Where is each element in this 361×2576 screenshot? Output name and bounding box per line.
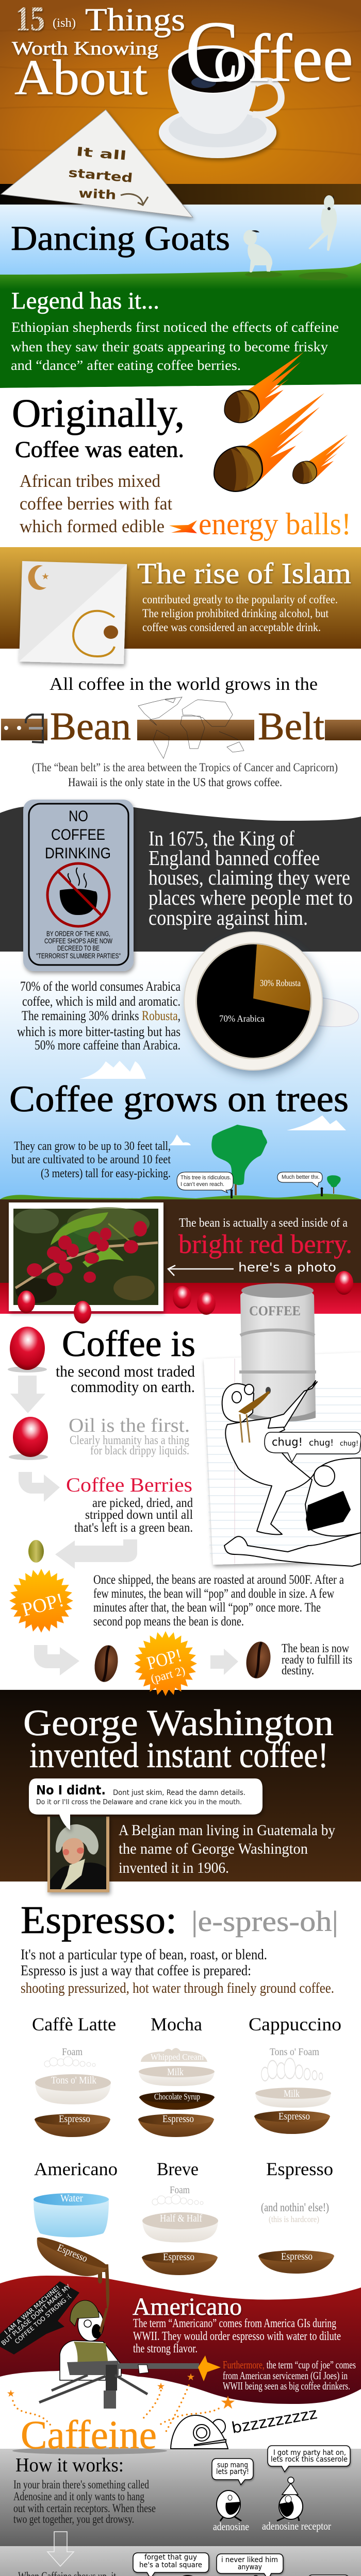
text block: shepherds: when they saw their goats appearing to become frisky [11, 339, 329, 354]
icon: flaming coffee ball 1 [224, 352, 304, 423]
robusta label: 30% Robusta [260, 978, 301, 988]
panel: coffee grows on trees sky [0, 952, 361, 1199]
character: adenosine [217, 2490, 241, 2521]
speech bubble: party hat: lets rock this casserole [271, 2455, 348, 2464]
heading: originally: Originally, [12, 391, 185, 435]
diagram: mocha: Whipped Cream [151, 2052, 204, 2062]
arrow: left [55, 1539, 137, 1569]
diagram: mocha: Espresso [162, 2113, 194, 2125]
diagram: americano: Water [60, 2193, 83, 2204]
label: adenosine receptor: adenosine receptor [262, 2520, 331, 2532]
panel: how it works 2 [0, 2546, 361, 2576]
text block: adenosine: Adenosine and it only wants to hang [13, 2490, 144, 2503]
icon: green bean [28, 1540, 44, 1563]
text block: arabica and robusta: The remaining 30% drinks Robusta, [22, 1008, 180, 1023]
world map outline [138, 697, 244, 758]
speech bubble: war machine: BUT PLEASE DON'T MAKE MY [0, 2283, 72, 2347]
speech bubble: party hat [268, 2446, 350, 2472]
speech bubble: chug: chug! [309, 1438, 334, 1448]
diagram: cappuccino: Espresso [278, 2111, 310, 2122]
napkin: it all started with: started [68, 165, 133, 185]
speech bubble: much better: Much better thx. [282, 1174, 320, 1180]
speech bubble: war machine: I AM A WAR MACHINE! [3, 2284, 61, 2336]
heading: coffee grows on trees: Coffee grows on trees [9, 1078, 349, 1120]
diagram: cappuccino: Tons o' Foam [270, 2046, 319, 2058]
sign: no coffee drinking: DECREED TO BE [57, 944, 100, 952]
tilted espresso: Espresso [56, 2242, 89, 2264]
text block: arabica and robusta: 70% of the world consumes Arabica [20, 979, 180, 994]
mug handle [253, 81, 281, 115]
text block: adenosine: In your brain there's something called [13, 2478, 149, 2491]
icon: napkin with coffee stain crescent [19, 561, 127, 664]
belt strap right [325, 720, 361, 740]
starburst: pop part 2: POP! [145, 1645, 184, 1673]
icon: flaming coffee ball 2 [214, 393, 324, 492]
text block: african tribes [20, 471, 172, 536]
diagram: espresso: (and nothin' else!) [261, 2201, 329, 2214]
diagram: breve: Breve [157, 2159, 199, 2179]
title: About [14, 50, 147, 106]
napkin: it all started with [1, 110, 193, 217]
speech bubble: chug: chug! [340, 1440, 358, 1448]
panel: how it works 1 [0, 2449, 361, 2546]
diagram: mocha: Milk [167, 2066, 184, 2078]
starburst: pop [9, 1569, 73, 1633]
word: belt: Belt [258, 705, 324, 748]
berries on branch [27, 1221, 147, 1286]
text block: islam [142, 593, 338, 634]
portrait: george washington [47, 1817, 109, 1892]
text block: king: In 1675, the King of [149, 826, 294, 850]
text block: second most traded: commodity on earth. [71, 1378, 195, 1396]
panel: originally white background [0, 384, 361, 547]
diagram: breve: Espresso [163, 2251, 194, 2263]
text block: belgian man [119, 1822, 335, 1876]
sign: no coffee drinking: NO [69, 808, 88, 825]
people [230, 1187, 323, 1198]
coffee stream into mouth [99, 2308, 108, 2334]
belt strap left [1, 719, 47, 740]
diagram: breve: Half & Half [160, 2213, 202, 2224]
torso [60, 2341, 121, 2380]
text block: espresso definition [21, 1946, 334, 1996]
heading: espresso: Espresso: [21, 1899, 177, 1942]
bean belt graphic [1, 697, 361, 758]
lower leg [224, 1533, 361, 1566]
text block: king [149, 826, 353, 929]
text block: picked and dried: are picked, dried, and [92, 1496, 193, 1510]
speech bubble: forget that guy [133, 2553, 209, 2576]
starburst: pop part 2: (part 2) [150, 1664, 187, 1685]
speech bubble: no i didnt: No I didnt. [36, 1783, 106, 1798]
icon: saucer [159, 107, 276, 158]
text block: cup of joe [223, 2359, 356, 2392]
energy balls: energy balls! [199, 507, 351, 541]
tall tree [235, 1180, 237, 1195]
panel: rise of islam [0, 547, 361, 664]
text block: picked and dried: stripped down until all [85, 1508, 193, 1522]
tilted espresso [29, 2233, 109, 2285]
speech bubble: lonely [308, 2575, 349, 2576]
text block: adenosine: two get together, you get drowsy. [13, 2513, 134, 2526]
caption: hawaii: Hawaii is the only state in the US that grows coffee. [68, 776, 282, 789]
text block: arabica and robusta: coffee, which is mild and aromatic. [22, 994, 180, 1009]
icon: second coffee berry [9, 1417, 48, 1460]
speech bubble: no i didnt: Do it or I'll cross the Delaware and crane kick you in the mouth. [36, 1799, 242, 1806]
speech bubble: no i didnt: Dont just skim, Read the damn details. [113, 1789, 245, 1797]
character: sleeping head [171, 2415, 228, 2449]
speech bubble: war machine: COFFEE TOO STRONG :( [13, 2293, 73, 2345]
text block: arabica and robusta: 50% more caffeine than Arabica. [35, 1038, 180, 1053]
diagram: breve [142, 2159, 218, 2275]
diagram: espresso: Espresso [281, 2251, 313, 2262]
panel: king of england banned coffee [0, 807, 361, 952]
word: bean: Bean [50, 705, 131, 748]
text block: tree height: but are cultivated to be around 10 feet [11, 1153, 171, 1166]
text block: americano origin [133, 2317, 341, 2355]
arrow on napkin [121, 194, 148, 205]
heading: americano: Americano [133, 2293, 242, 2320]
panel: wooden table header [0, 0, 361, 184]
speech bubble: party hat: I got my party hat on, [273, 2449, 346, 2457]
text block: bean's destiny [282, 1642, 352, 1677]
diagram: cappuccino: Milk [284, 2088, 300, 2099]
characters: caffeine blocks receptors [133, 2553, 349, 2576]
text block: belgian man: A Belgian man living in Guatemala by [119, 1822, 335, 1839]
body [225, 1417, 361, 1536]
diagram: caffe latte: Tons o' Milk [51, 2075, 96, 2086]
notebook paper [204, 1352, 361, 1565]
text block: americano origin: the strong flavor. [133, 2342, 198, 2355]
diagram: espresso [258, 2159, 334, 2274]
text block: african tribes: which formed edible [20, 516, 165, 536]
character: adenosine receptor [277, 2477, 303, 2521]
arrow: bend right 2 [34, 1645, 79, 1675]
text: seed inside berry: The bean is actually a seed inside of a [179, 1216, 348, 1230]
icon: energy streak [169, 520, 197, 533]
text block: tree height [11, 1140, 171, 1180]
arrow: right [210, 1649, 238, 1675]
text block: black drippy liquids [70, 1434, 189, 1458]
speech bubble: chug: chug! [272, 1436, 303, 1448]
diagram: espresso: Espresso [266, 2159, 333, 2179]
text block: picked and dried [74, 1496, 193, 1535]
diagram: cappuccino: Cappuccino [249, 2014, 341, 2035]
heading: invented instant coffee: invented instant coffee! [29, 1736, 329, 1775]
buckle prong [29, 727, 43, 730]
text block: second most traded: the second most traded [56, 1362, 195, 1380]
label: adenosine: adenosine [213, 2520, 249, 2533]
character: receptor 2 [242, 2575, 268, 2576]
character: chugging from barrel [222, 1381, 361, 1566]
title: Things [85, 3, 185, 38]
icon: big coffee berry [8, 1327, 47, 1372]
arrow to photo [168, 1265, 234, 1276]
diagram: mocha: Mocha [151, 2014, 202, 2035]
heading: oil is the first: Oil is the first. [69, 1415, 190, 1436]
black shorts [306, 1492, 350, 1530]
belt strap middle [137, 720, 254, 740]
spigot hole [266, 1387, 271, 1394]
icon: coffee mug [168, 45, 281, 134]
arabica label: 70% Arabica [219, 1013, 265, 1024]
diagram: caffe latte: Caffè Latte [32, 2014, 116, 2035]
arrow: down [10, 1376, 45, 1413]
starburst: pop part 2 [134, 1631, 197, 1696]
arm [268, 1381, 317, 1428]
text block: shepherds: and “dance” after eating coffee berries. [11, 358, 241, 373]
sign: no coffee drinking: COFFEE SHOPS ARE NOW [44, 937, 113, 945]
starburst: pop: POP! [20, 1589, 66, 1621]
bubbles and adenosine characters [212, 2446, 350, 2521]
arrow: outline down 1 [47, 2532, 74, 2566]
text block: roasting [93, 1573, 344, 1629]
text block: islam: The religion prohibited drinking alcohol, but [142, 607, 329, 620]
text block: king: England banned coffee [149, 846, 320, 870]
diagram: americano [29, 2159, 118, 2309]
text block: belgian man: the name of George Washington [119, 1840, 308, 1857]
speech bubble: much better [277, 1172, 322, 1187]
speech bubble: chug [265, 1432, 361, 1462]
cup handle [315, 997, 358, 1027]
stars and dotted trails [7, 2373, 235, 2434]
text block: adenosine [13, 2478, 156, 2526]
head [78, 2308, 104, 2341]
barrel label: COFFEE [249, 1303, 301, 1318]
speech bubble: no i didnt [29, 1778, 262, 1830]
snoring: bzzzz: bzzzzzzzzz [230, 2404, 319, 2437]
text block: arabica and robusta: which is more bitter-tasting but has [17, 1024, 180, 1039]
text block: espresso definition: Espresso is just a way that coffee is prepared: [21, 1962, 251, 1979]
pronunciation: |e-spres-oh| [191, 1906, 338, 1938]
text block: bean's destiny: destiny. [282, 1664, 314, 1677]
title: C [185, 3, 239, 100]
barrel of coffee [239, 1283, 316, 1422]
title: offee [213, 20, 353, 96]
tree scene [0, 1125, 361, 1199]
text block: bean's destiny: The bean is now [282, 1642, 350, 1655]
coffee stream [238, 1391, 270, 1414]
panel: americano band [0, 2276, 361, 2404]
heading: george washington: George Washington [23, 1702, 334, 1743]
diagram: caffe latte [32, 2014, 116, 2137]
text block: king: conspire against him. [149, 906, 308, 929]
text block: espresso definition: It's not a particular type of bean, roast, or blend. [21, 1946, 267, 1963]
speech bubble: never liked him [217, 2554, 283, 2576]
speech bubble: can't reach: This tree is ridiculous. [180, 1175, 231, 1181]
diagram: caffe latte: Foam [62, 2046, 83, 2058]
icon: crossed-out coffee cup [47, 863, 109, 926]
diagram: cappuccino [249, 2014, 341, 2134]
speech bubble: never liked him: i never liked him [221, 2556, 278, 2564]
speech bubble: can't reach [177, 1172, 233, 1193]
text block: roasting: second pop means the bean is done. [93, 1615, 244, 1629]
speech bubble: forget that guy: he's a total square [139, 2561, 202, 2569]
short tree [333, 1184, 334, 1194]
speech bubble: sup mang [212, 2459, 253, 2485]
character: caffeine [173, 2575, 206, 2576]
text block: islam: coffee was considered an acceptable drink. [142, 621, 321, 634]
icon: roasted bean 2 [243, 1640, 273, 1680]
heading: all coffee grows: All coffee in the world grows in the [50, 674, 318, 694]
belt holes [4, 726, 21, 730]
panel: legend has it [0, 263, 361, 388]
sign: no coffee drinking [23, 800, 134, 971]
title: Worth Knowing [12, 38, 158, 59]
heading: dancing goats: Dancing Goats [11, 218, 230, 258]
diagram: mocha [138, 2014, 215, 2137]
text block: shepherds [11, 319, 339, 373]
heading: legend has it: Legend has it... [11, 287, 159, 314]
sign: no coffee drinking: DRINKING [45, 845, 111, 862]
text block: belgian man: invented it in 1906. [119, 1859, 229, 1876]
diagram: breve: Foam [170, 2184, 190, 2196]
text block: black drippy liquids: Clearly humanity has a thing [70, 1434, 189, 1447]
clouds [79, 1061, 346, 1145]
heading: rise of islam: The rise of Islam [137, 557, 351, 590]
text block: tree height: They can grow to be up to 30 feet tall, [14, 1140, 171, 1153]
speech bubble: sup mang: sup mang [217, 2461, 248, 2469]
leaves [51, 1212, 108, 1245]
panel: dancing goats sky [0, 205, 361, 277]
sign: no coffee drinking: "TERRORIST SLUMBER PARTIES" [36, 952, 121, 960]
icon: roasted bean 1 [92, 1643, 121, 1684]
speech bubble: sup mang: lets party! [216, 2468, 249, 2476]
title: 15 [15, 0, 45, 38]
heading: how it works: How it works: [15, 2454, 124, 2476]
chart: coffee cup pie chart [184, 932, 358, 1070]
handwritten note: here's a photo: here's a photo [238, 1260, 336, 1275]
text block: arabica and robusta [17, 979, 180, 1053]
muzzle flash [198, 2355, 221, 2381]
dark band below table [0, 184, 361, 205]
napkin: it all started with: It all [75, 144, 127, 163]
text block: second most traded [56, 1362, 195, 1396]
text block: picked and dried: that's left is a green bean. [74, 1521, 193, 1535]
photo: coffee berries on branch [9, 1202, 163, 1311]
ground hills [0, 1194, 361, 1199]
text block: adenosine: out with certain receptors. When these [13, 2502, 156, 2515]
heading: caffeine: Caffeine [21, 2412, 157, 2457]
heading: bright red berry: bright red berry. [178, 1230, 352, 1259]
text block: tree height: (3 meters) tall for easy-picking. [41, 1167, 171, 1180]
speech bubble: forget that guy: forget that guy [144, 2553, 197, 2562]
sign: no coffee drinking: BY ORDER OF THE KING, [46, 929, 110, 938]
robusta wedge [253, 944, 310, 1011]
gun [67, 2361, 119, 2375]
belt buckle [26, 714, 43, 742]
diagram: caffe latte: Espresso [59, 2113, 90, 2125]
arrow: bend right [19, 1472, 60, 1502]
head [222, 1384, 254, 1422]
text block: black drippy liquids: for black drippy liquids. [90, 1444, 189, 1458]
text block: shepherds: Ethiopian shepherds first noticed the effects of caffeine [11, 319, 339, 335]
poured espresso drip [98, 2264, 109, 2309]
character: soldier with machine gun [0, 2281, 221, 2409]
icon: flaming coffee ball 3 [293, 435, 348, 484]
decorative red berries [18, 1271, 353, 1324]
title [12, 0, 353, 106]
speech bubble: never liked him: anyway [238, 2563, 262, 2571]
napkin: it all started with: with [78, 186, 117, 202]
sign: no coffee drinking: COFFEE [51, 826, 105, 843]
text block: african tribes: coffee berries with fat [20, 494, 172, 514]
heading: coffee berries: Coffee Berries [66, 1474, 192, 1496]
icon: sitting goat [243, 230, 282, 278]
heading: coffee is: Coffee is [62, 1323, 195, 1364]
rear [314, 1466, 335, 1486]
diagram: americano: Americano [34, 2159, 118, 2179]
panel: bright red berry [0, 1199, 361, 1324]
text block: islam: contributed greatly to the popularity of coffee. [142, 593, 338, 606]
icon: dancing goat [299, 195, 348, 280]
text block: african tribes: African tribes mixed [20, 471, 160, 491]
diagram: mocha: Chocolate Syrup [154, 2092, 200, 2102]
title: (ish) [53, 16, 76, 30]
panel: george washington [0, 1690, 361, 1882]
subheading: coffee was eaten: Coffee was eaten. [15, 437, 184, 462]
speech bubble: can't reach: I can’t even reach. [180, 1181, 224, 1188]
diagram: espresso: (this is hardcore) [269, 2214, 319, 2224]
